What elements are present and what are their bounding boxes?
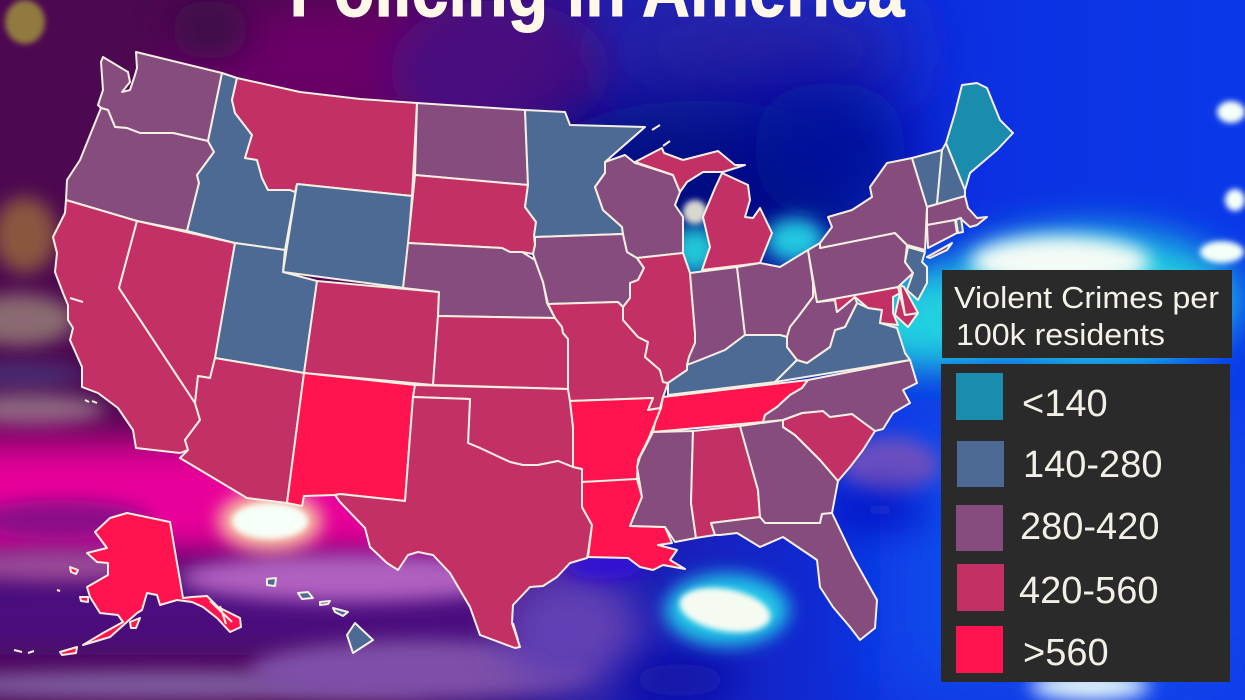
legend item: 140-280 [957, 441, 1162, 487]
state: Iowa [533, 234, 644, 307]
state: Kentucky [668, 335, 797, 395]
legend title box [942, 270, 1232, 358]
state: Wisconsin [595, 155, 683, 258]
legend item: over 560 [956, 626, 1109, 674]
legend item: 140-280: 140-280 [1023, 444, 1162, 486]
state: Ohio [737, 250, 813, 337]
state: Michigan [635, 125, 772, 270]
state: Texas [335, 397, 592, 648]
state: Virginia [775, 303, 910, 382]
legend item: 420-560: 420-560 [1019, 570, 1158, 612]
state: Louisiana [582, 479, 685, 570]
state: Oklahoma [413, 385, 573, 467]
legend item: under 140: <140 [1022, 383, 1108, 425]
legend title box: Violent Crimes per [954, 280, 1219, 315]
state: Mississippi [630, 431, 696, 542]
legend item: 280-420 [956, 505, 1159, 551]
state: Minnesota [525, 110, 645, 237]
state: Maryland [817, 287, 918, 327]
legend title box: 100k residents [956, 317, 1165, 352]
state: Long Island [927, 243, 952, 258]
state: South Dakota [408, 175, 536, 254]
state: New Mexico [287, 373, 415, 506]
state: North Dakota [415, 103, 528, 185]
state: Missouri [548, 302, 668, 410]
legend panel [941, 364, 1230, 682]
state: Arkansas [570, 398, 661, 482]
state: Tennessee [653, 380, 808, 432]
state: Washington [98, 52, 222, 141]
state: Arizona [180, 358, 304, 503]
state: Alabama [691, 426, 760, 538]
legend item: 420-560 [957, 564, 1158, 612]
state: South Carolina [783, 411, 875, 481]
state: New York [820, 158, 927, 250]
state: Nebraska [403, 243, 555, 318]
state: New Jersey [905, 247, 927, 300]
state: Rhode Island [956, 218, 963, 233]
state: Illinois [623, 253, 695, 383]
state: Utah [215, 243, 317, 373]
state: Hawaii [267, 578, 373, 653]
state: West Virginia [787, 283, 857, 363]
state: New Hampshire [937, 143, 965, 204]
state: Delaware [900, 285, 918, 315]
state: Maine [946, 83, 1013, 190]
state: Wyoming [283, 184, 412, 288]
state: Kansas [433, 316, 568, 389]
map of US states by violent crime rate [14, 52, 1013, 655]
state: Massachusetts [927, 196, 987, 227]
state: Vermont [912, 150, 942, 207]
state: Oregon [66, 108, 214, 231]
coastal islands [70, 298, 518, 640]
legend item: under 140 [956, 373, 1108, 425]
state: Montana [232, 78, 417, 196]
state: Pennsylvania [808, 233, 913, 302]
state: Georgia [740, 420, 838, 523]
state: Idaho [187, 73, 297, 250]
state: Nevada [119, 221, 235, 403]
legend item: over 560: >560 [1023, 632, 1109, 674]
state: North Carolina [763, 360, 917, 431]
state: California [53, 200, 200, 453]
state: Connecticut [927, 220, 957, 248]
state: Indiana [687, 267, 745, 365]
state: Colorado [304, 281, 439, 385]
state: Alaska [14, 513, 241, 655]
state: Florida [711, 513, 877, 640]
legend item: 280-420: 280-420 [1020, 506, 1159, 548]
